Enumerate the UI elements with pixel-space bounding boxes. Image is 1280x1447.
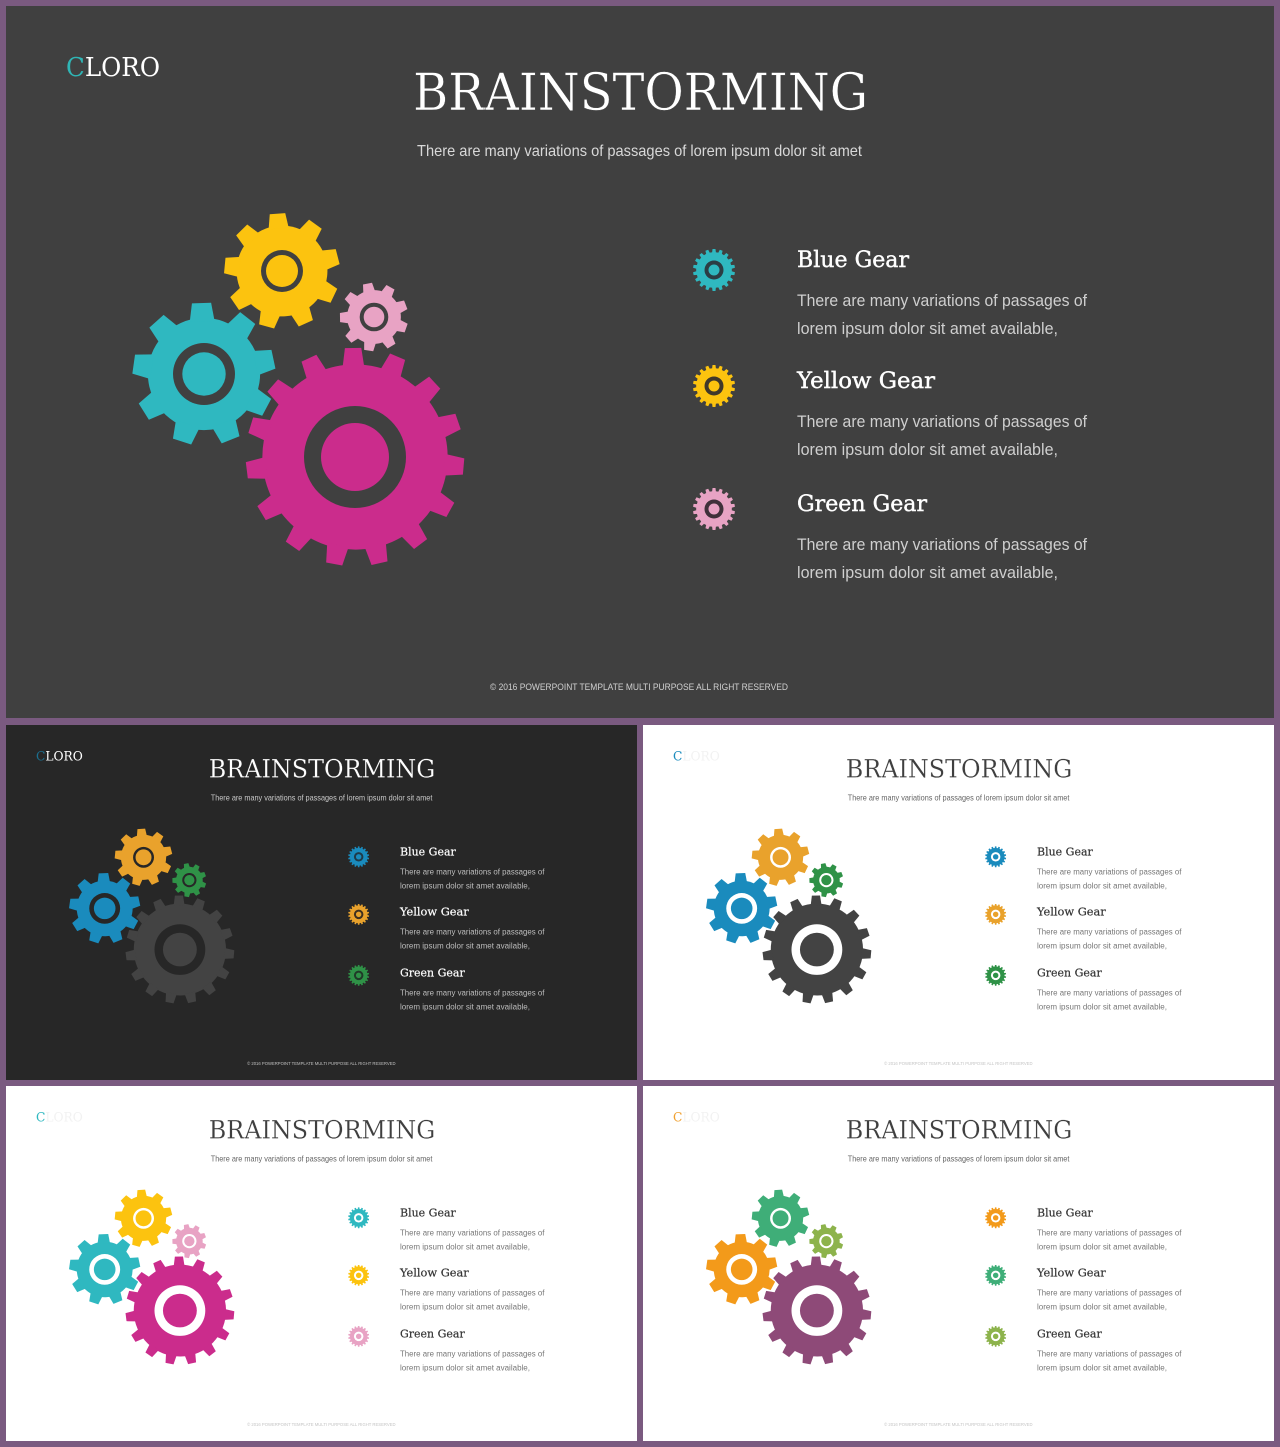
footer: © 2016 POWERPOINT TEMPLATE MULTI PURPOSE ALL RIGHT RESERVED — [884, 1060, 1033, 1066]
icon: blue gear — [985, 846, 1006, 867]
description: There are many variations of passages of — [400, 1349, 545, 1359]
description: There are many variations of passages of — [797, 412, 1087, 431]
heading: Blue Gear — [1037, 1206, 1093, 1219]
subtitle: There are many variations of passages of lorem ipsum dolor sit amet — [417, 143, 863, 160]
heading: Green Gear — [1037, 966, 1102, 979]
legend item: blue gear — [985, 845, 1182, 891]
description: lorem ipsum dolor sit amet available, — [400, 941, 530, 951]
gear: blue — [68, 872, 142, 945]
heading: Blue Gear — [1037, 845, 1093, 858]
panel: main dark slide — [6, 6, 1274, 718]
legend item: yellow gear — [348, 1265, 545, 1312]
icon: yellow gear — [348, 1265, 369, 1286]
icon: green gear — [985, 1265, 1006, 1286]
footer: © 2016 POWERPOINT TEMPLATE MULTI PURPOSE ALL RIGHT RESERVED — [490, 682, 788, 692]
description: lorem ipsum dolor sit amet available, — [400, 1363, 530, 1373]
logo: CLORO — [66, 53, 160, 83]
description: There are many variations of passages of — [1037, 988, 1182, 998]
legend item: blue gear — [348, 845, 545, 891]
description: There are many variations of passages of — [400, 988, 545, 998]
icon: orange gear — [985, 904, 1006, 925]
gear: orange — [705, 1233, 779, 1306]
icon: orange gear — [348, 904, 369, 925]
description: There are many variations of passages of — [400, 867, 545, 877]
heading: Blue Gear — [400, 1206, 456, 1219]
icon: teal gear — [348, 1207, 369, 1228]
heading: Blue Gear — [400, 845, 456, 858]
description: lorem ipsum dolor sit amet available, — [400, 881, 530, 891]
description: lorem ipsum dolor sit amet available, — [400, 1002, 530, 1012]
title: BRAINSTORMING — [413, 64, 868, 123]
heading: Green Gear — [1037, 1327, 1102, 1340]
gear: green — [169, 860, 209, 900]
legend item: yellow gear — [985, 904, 1182, 951]
description: There are many variations of passages of — [797, 291, 1087, 310]
heading: Yellow Gear — [399, 1266, 469, 1279]
heading: Yellow Gear — [1036, 1266, 1106, 1279]
description: There are many variations of passages of — [1037, 1349, 1182, 1359]
panel: near-black variant — [6, 725, 637, 1080]
gear: pink — [334, 277, 414, 357]
description: There are many variations of passages of — [400, 927, 545, 937]
icon: orange gear — [985, 1207, 1006, 1228]
gear cluster — [129, 209, 466, 568]
gear: orange — [112, 827, 175, 888]
gear: plum — [761, 1256, 872, 1366]
gear: grey — [761, 895, 872, 1005]
heading: Yellow Gear — [796, 368, 935, 394]
heading: Yellow Gear — [1036, 905, 1106, 918]
gear cluster — [705, 1188, 872, 1366]
heading: Blue Gear — [797, 247, 909, 273]
description: There are many variations of passages of — [1037, 927, 1182, 937]
gear: green — [749, 1188, 812, 1249]
description: lorem ipsum dolor sit amet available, — [400, 1242, 530, 1252]
subtitle: There are many variations of passages of lorem ipsum dolor sit amet — [848, 793, 1070, 802]
logo: CLORO — [673, 1111, 720, 1126]
gear cluster — [705, 827, 872, 1005]
gear: blue — [705, 872, 779, 945]
description: lorem ipsum dolor sit amet available, — [400, 1302, 530, 1312]
legend item: yellow gear — [985, 1265, 1182, 1312]
legend item: green gear — [348, 965, 545, 1012]
description: There are many variations of passages of — [400, 1228, 545, 1238]
logo: CLORO — [673, 750, 720, 765]
icon: green gear — [348, 965, 369, 986]
description: lorem ipsum dolor sit amet available, — [1037, 1302, 1167, 1312]
gear cluster — [68, 827, 235, 1005]
icon: lime gear — [985, 1326, 1006, 1347]
description: lorem ipsum dolor sit amet available, — [1037, 1363, 1167, 1373]
gear: pink — [169, 1221, 209, 1261]
heading: Green Gear — [400, 1327, 465, 1340]
subtitle: There are many variations of passages of lorem ipsum dolor sit amet — [848, 1154, 1070, 1163]
description: There are many variations of passages of — [400, 1288, 545, 1298]
footer: © 2016 POWERPOINT TEMPLATE MULTI PURPOSE ALL RIGHT RESERVED — [247, 1060, 396, 1066]
gear: yellow — [219, 209, 345, 333]
icon: yellow gear — [693, 365, 735, 407]
gear: teal — [129, 301, 279, 447]
legend item: green gear — [985, 965, 1182, 1012]
legend item: green gear — [985, 1326, 1182, 1373]
panel: white variant blue-orange-green — [643, 725, 1274, 1080]
legend item: blue gear — [348, 1206, 545, 1252]
gear: yellow — [112, 1188, 175, 1249]
description: There are many variations of passages of — [797, 535, 1087, 554]
subtitle: There are many variations of passages of lorem ipsum dolor sit amet — [211, 1154, 433, 1163]
icon: teal gear — [693, 249, 735, 291]
legend item: green gear — [348, 1326, 545, 1373]
icon: blue gear — [348, 846, 369, 867]
footer: © 2016 POWERPOINT TEMPLATE MULTI PURPOSE ALL RIGHT RESERVED — [247, 1421, 396, 1427]
icon: green gear — [985, 965, 1006, 986]
icon: pink gear — [348, 1326, 369, 1347]
legend item: yellow gear — [348, 904, 545, 951]
gear: magenta — [244, 346, 466, 568]
description: lorem ipsum dolor sit amet available, — [1037, 941, 1167, 951]
gear: teal — [68, 1233, 142, 1306]
description: lorem ipsum dolor sit amet available, — [797, 440, 1058, 459]
icon: pink gear — [693, 488, 735, 530]
heading: Yellow Gear — [399, 905, 469, 918]
heading: Green Gear — [797, 491, 927, 517]
description: lorem ipsum dolor sit amet available, — [797, 319, 1058, 338]
gear: lime — [806, 1221, 846, 1261]
legend item: blue gear — [985, 1206, 1182, 1252]
description: There are many variations of passages of — [1037, 1288, 1182, 1298]
title: BRAINSTORMING — [846, 1115, 1072, 1144]
title: BRAINSTORMING — [209, 754, 435, 783]
description: There are many variations of passages of — [1037, 867, 1182, 877]
logo: CLORO — [36, 750, 83, 765]
gear: magenta — [124, 1256, 235, 1366]
description: There are many variations of passages of — [1037, 1228, 1182, 1238]
legend item: yellow gear — [693, 365, 1087, 459]
title: BRAINSTORMING — [209, 1115, 435, 1144]
description: lorem ipsum dolor sit amet available, — [1037, 1242, 1167, 1252]
subtitle: There are many variations of passages of lorem ipsum dolor sit amet — [211, 793, 433, 802]
legend item: blue gear — [693, 247, 1087, 338]
description: lorem ipsum dolor sit amet available, — [797, 563, 1058, 582]
title: BRAINSTORMING — [846, 754, 1072, 783]
panel: white variant teal-yellow-magenta — [6, 1086, 637, 1441]
gear: green — [806, 860, 846, 900]
gear cluster — [68, 1188, 235, 1366]
logo: CLORO — [36, 1111, 83, 1126]
gear: grey — [124, 895, 235, 1005]
legend item: green gear — [693, 488, 1087, 582]
heading: Green Gear — [400, 966, 465, 979]
description: lorem ipsum dolor sit amet available, — [1037, 1002, 1167, 1012]
panel: white variant orange-green-plum — [643, 1086, 1274, 1441]
gear: orange — [749, 827, 812, 888]
description: lorem ipsum dolor sit amet available, — [1037, 881, 1167, 891]
footer: © 2016 POWERPOINT TEMPLATE MULTI PURPOSE ALL RIGHT RESERVED — [884, 1421, 1033, 1427]
